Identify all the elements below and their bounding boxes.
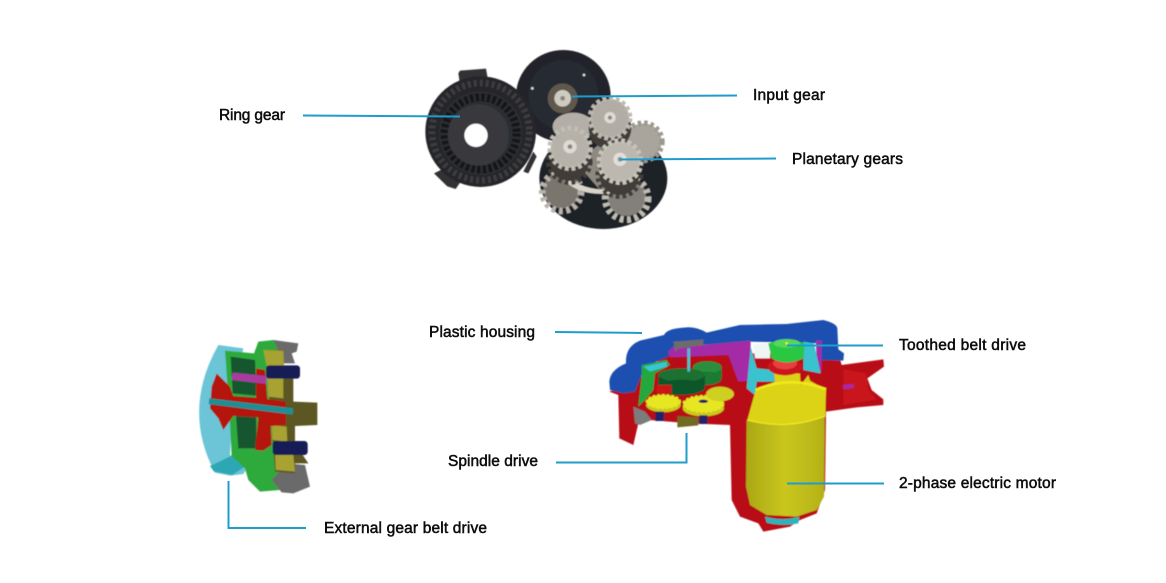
label: planetary gears: Planetary gears xyxy=(792,151,903,168)
navy pins xyxy=(266,365,300,379)
ring gear xyxy=(425,69,537,189)
label: input gear: Input gear xyxy=(753,87,825,104)
leader: planetary gears xyxy=(620,158,776,160)
leader: toothed belt drive xyxy=(787,344,883,346)
yellow gears xyxy=(646,385,734,427)
dark green gears xyxy=(658,348,722,395)
label: plastic housing: Plastic housing xyxy=(429,324,535,341)
grey and purple interior xyxy=(668,341,751,382)
label: spindle drive: Spindle drive xyxy=(448,453,538,470)
olive plate xyxy=(263,350,317,473)
label: toothed belt drive: Toothed belt drive xyxy=(899,337,1026,354)
purple pin xyxy=(232,373,267,384)
planet carrier base xyxy=(539,113,667,229)
blue housing xyxy=(609,320,844,393)
red frame xyxy=(609,353,884,532)
dark green gears xyxy=(231,357,257,448)
leader: plastic housing xyxy=(555,332,642,333)
leader: spindle drive xyxy=(556,433,686,462)
illustration: actuator cutaway xyxy=(609,320,884,532)
leader: electric motor xyxy=(787,482,884,484)
photo: planetary gearbox parts xyxy=(425,50,667,229)
label: ring gear: Ring gear xyxy=(219,107,285,124)
leader: external gear belt drive xyxy=(228,481,306,528)
grey end plate xyxy=(272,340,310,493)
leader: ring gear xyxy=(303,116,460,117)
teal shaft xyxy=(209,398,293,415)
red hub xyxy=(210,368,286,451)
label: external gear belt drive: External gear belt drive xyxy=(324,520,487,537)
input gear disc xyxy=(516,50,611,142)
motor xyxy=(746,373,826,525)
cyan cover xyxy=(199,345,252,476)
illustration: external gear section xyxy=(199,340,317,493)
toothed belt pulley xyxy=(768,339,805,375)
cyan and green inner housing xyxy=(638,360,670,407)
leader: input gear xyxy=(572,96,737,97)
planetary gears xyxy=(549,98,641,196)
green housing xyxy=(225,340,287,492)
label: 2-phase electric motor: 2-phase electric motor xyxy=(899,475,1056,492)
